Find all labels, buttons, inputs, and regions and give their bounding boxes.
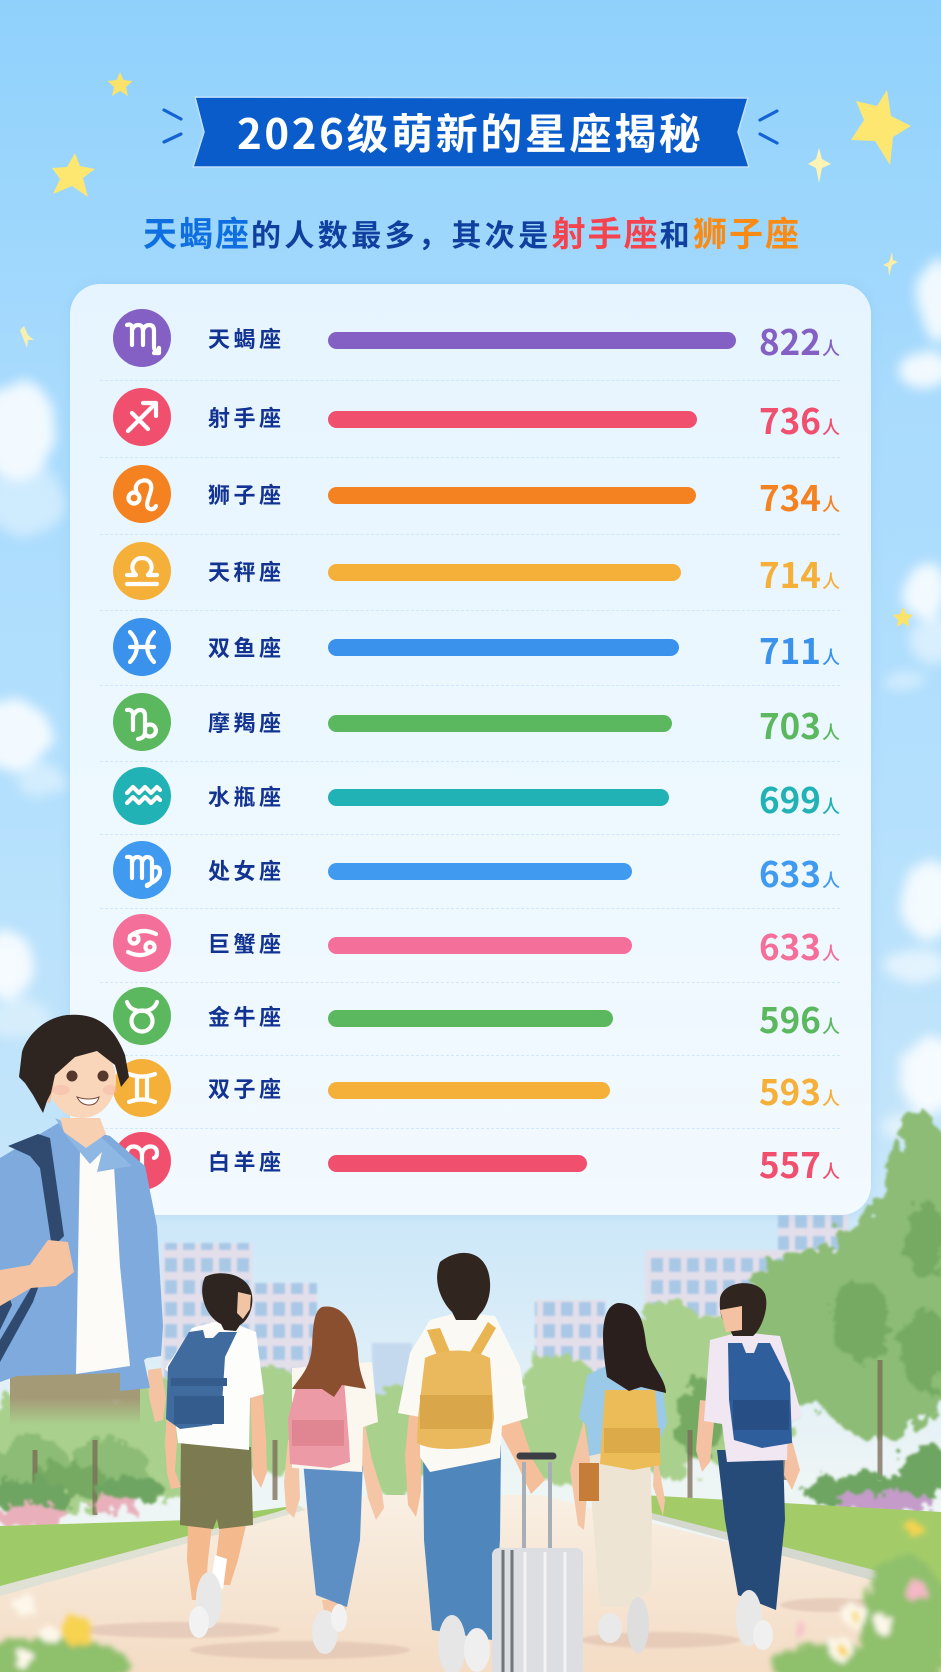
row: Cancer 633 [113,914,840,972]
title text: 2026级萌新的星座揭秘 [237,101,703,162]
row: Virgo 633: 633人 [759,847,840,898]
row: Gemini 593 [114,1059,840,1117]
student: centre boy with yellow backpack and suitcase [398,1253,583,1672]
row: Leo 734 [113,465,840,523]
row: Aries 557: 白羊座 [208,1145,285,1177]
row: Capricorn 703: 摩羯座 [208,706,285,738]
row: Aquarius 699: 699人 [759,773,840,824]
row: Pisces 711 [113,618,840,676]
row: Taurus 596 [113,987,840,1045]
buildings [162,1215,848,1413]
title banner [192,96,750,168]
row: Cancer 633: 633人 [759,920,840,971]
foreground flowers [0,1522,941,1672]
row: Taurus 596: 金牛座 [208,1000,285,1032]
student: boy with navy backpack left [165,1273,267,1638]
walkway [0,1495,941,1672]
row: Scorpio 822: 天蝎座 [208,322,285,354]
row: Scorpio 822: 822人 [759,315,840,366]
row: Virgo 633: 处女座 [208,854,285,886]
row: Virgo 633 [113,841,840,899]
row: Sagittarius 736: 射手座 [208,401,285,433]
row: Gemini 593: 593人 [759,1065,840,1116]
row: Leo 734: 狮子座 [208,478,285,510]
row: Libra 714: 天秤座 [208,555,285,587]
trees and shrubs [0,1110,941,1515]
row: Cancer 633: 巨蟹座 [208,927,285,959]
row: Sagittarius 736 [113,388,840,446]
panel: constellation ranking [70,284,871,1215]
row: Gemini 593: 双子座 [208,1072,285,1104]
subtitle: 天蝎座的人数最多，其次是射手座和狮子座 [143,207,801,256]
student: girl with yellow backpack and book [570,1303,667,1653]
row: Taurus 596: 596人 [759,993,840,1044]
row: Aries 557 [118,1132,840,1189]
row: Libra 714 [113,542,840,600]
student: girl with pink backpack [284,1306,384,1654]
student: boy with navy backpack right [696,1283,802,1650]
row: Aquarius 699: 水瓶座 [208,780,285,812]
grass [0,1505,300,1596]
row: Scorpio 822 [113,309,840,367]
row: Pisces 711: 双鱼座 [208,631,285,663]
row: Capricorn 703: 703人 [759,699,840,750]
row: Aries 557: 557人 [759,1138,840,1189]
row: Capricorn 703 [113,693,840,751]
row: Leo 734: 734人 [759,471,840,522]
shadows on walkway [80,1598,880,1659]
row: Pisces 711: 711人 [759,624,840,675]
row: Aquarius 699 [113,767,840,825]
row: Libra 714: 714人 [759,548,840,599]
row: Sagittarius 736: 736人 [759,394,840,445]
